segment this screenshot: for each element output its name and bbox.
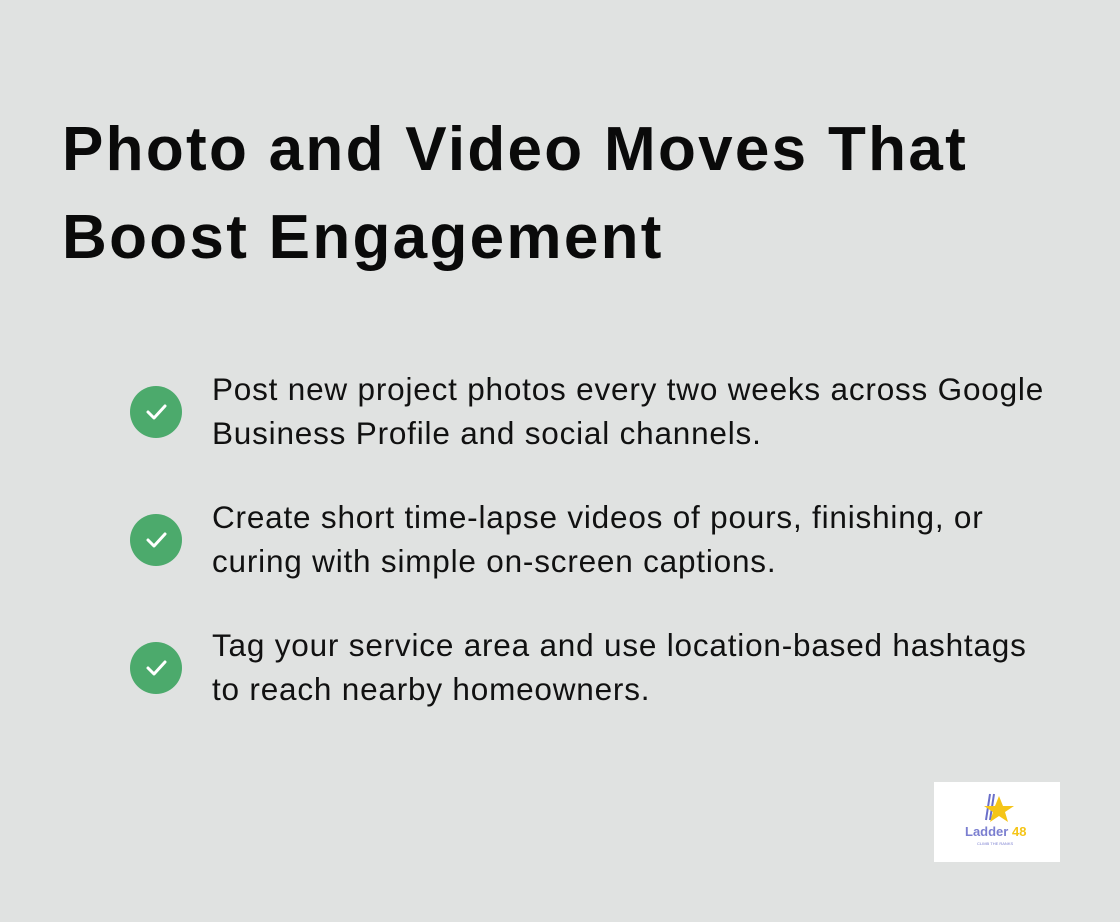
- text 1: [212, 371, 1044, 451]
- icon: check: [130, 386, 182, 438]
- text 1: Business Profile and social channels.: [212, 415, 762, 451]
- icon: check: [130, 514, 182, 566]
- text 2: curing with simple on-screen captions.: [212, 543, 776, 579]
- title: Photo and Video Moves That: [62, 115, 968, 184]
- logo: [934, 782, 1060, 862]
- item 3: [130, 627, 1027, 707]
- title: Boost Engagement: [62, 203, 664, 272]
- text 3: Tag your service area and use location-based hashtags: [212, 627, 1027, 663]
- item 1: [130, 371, 1044, 451]
- title: [62, 115, 968, 272]
- item 2: [130, 499, 984, 579]
- text 3: [212, 627, 1027, 707]
- text 2: [212, 499, 984, 579]
- logo: Ladder 48: [965, 824, 1026, 839]
- icon: check: [130, 642, 182, 694]
- text 1: Post new project photos every two weeks across Google: [212, 371, 1044, 407]
- text 2: Create short time-lapse videos of pours, finishing, or: [212, 499, 984, 535]
- text 3: to reach nearby homeowners.: [212, 671, 650, 707]
- logo: CLIMB THE RANKS: [977, 841, 1013, 846]
